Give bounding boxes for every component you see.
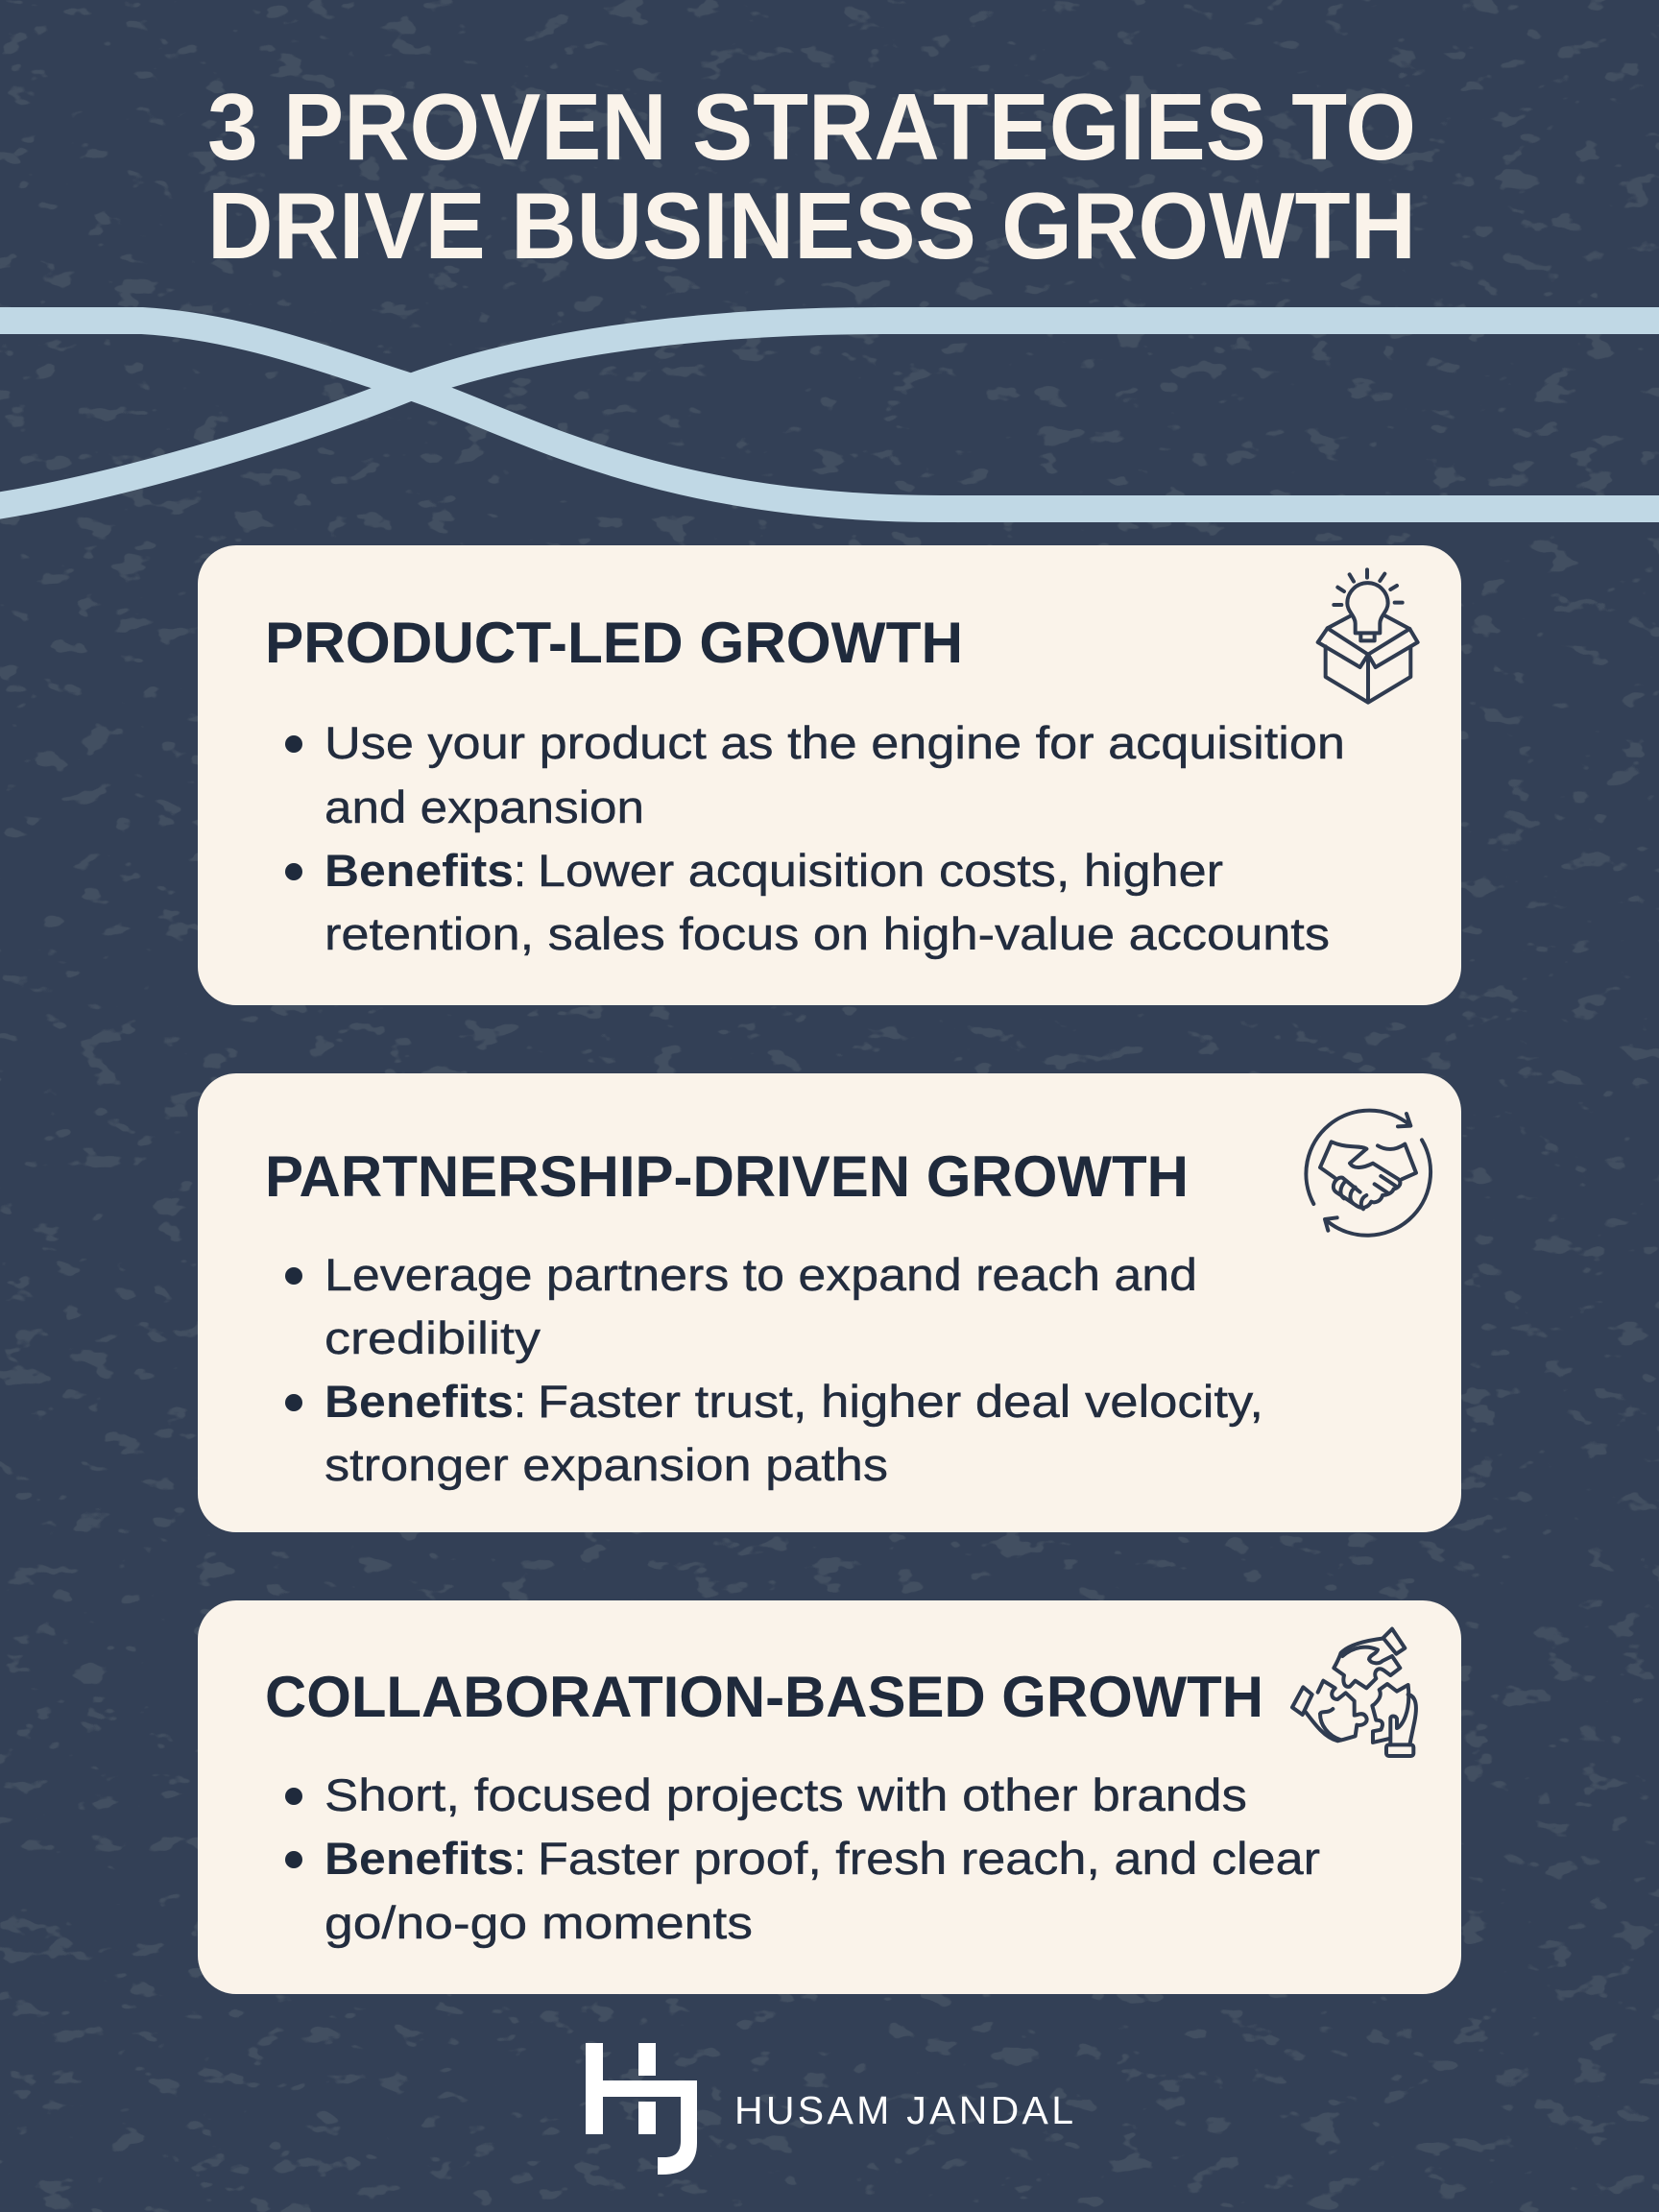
bullet list: partnership-driven growth: Benefits: [325, 1376, 514, 1427]
bullet list: product-led growth: :: [514, 845, 526, 896]
heading: collaboration-based growth: COLLABORATION-BASED GROWTH: [265, 1665, 1263, 1729]
panel: collaboration-based growth: [198, 1600, 1461, 1994]
bullet list: partnership-driven growth: :: [514, 1376, 526, 1427]
bullet list: partnership-driven growth: [285, 1249, 1263, 1490]
bullet list: collaboration-based growth: Faster proof, fresh reach, and clear: [538, 1833, 1320, 1884]
icon: light bulb in box: [1318, 569, 1418, 703]
heading: product-led growth: PRODUCT-LED GROWTH: [265, 611, 963, 675]
heading: partnership-driven growth: PARTNERSHIP-DRIVEN GROWTH: [265, 1144, 1189, 1209]
icon: handshake with cycle arrows: [1306, 1111, 1431, 1236]
bullet list: partnership-driven growth: stronger expansion paths: [325, 1439, 888, 1490]
panel: partnership-driven growth: [198, 1073, 1461, 1532]
title: 3 PROVEN STRATEGIES TO: [207, 74, 1416, 180]
bullet list: partnership-driven growth: Leverage partners to expand reach and: [325, 1249, 1197, 1300]
title: [207, 74, 1416, 278]
bullet list: collaboration-based growth: :: [514, 1833, 526, 1884]
logo: wordmark: HUSAM JANDAL: [734, 2088, 1073, 2132]
bullet list: product-led growth: retention, sales focus on high-value accounts: [325, 908, 1330, 959]
bullet list: partnership-driven growth: credibility: [325, 1312, 541, 1363]
bullet list: collaboration-based growth: go/no-go moments: [325, 1897, 753, 1948]
bullet list: product-led growth: Lower acquisition costs, higher: [538, 845, 1223, 896]
logo: HJ monogram: [586, 2043, 697, 2175]
panel: product-led growth: [198, 545, 1461, 1005]
bullet list: product-led growth: Benefits: [325, 845, 514, 896]
bullet list: collaboration-based growth: [285, 1769, 1320, 1948]
title: DRIVE BUSINESS GROWTH: [207, 173, 1416, 278]
bullet list: product-led growth: [285, 717, 1345, 959]
bullet list: collaboration-based growth: Benefits: [325, 1833, 514, 1884]
bullet list: product-led growth: Use your product as the engine for acquisition: [325, 717, 1345, 768]
bullet list: partnership-driven growth: Faster trust, higher deal velocity,: [538, 1376, 1263, 1427]
bullet list: product-led growth: and expansion: [325, 781, 644, 832]
icon: hands with puzzle pieces: [1292, 1629, 1416, 1756]
crossing ribbons: [0, 321, 1659, 509]
bullet list: collaboration-based growth: Short, focused projects with other brands: [325, 1769, 1247, 1820]
